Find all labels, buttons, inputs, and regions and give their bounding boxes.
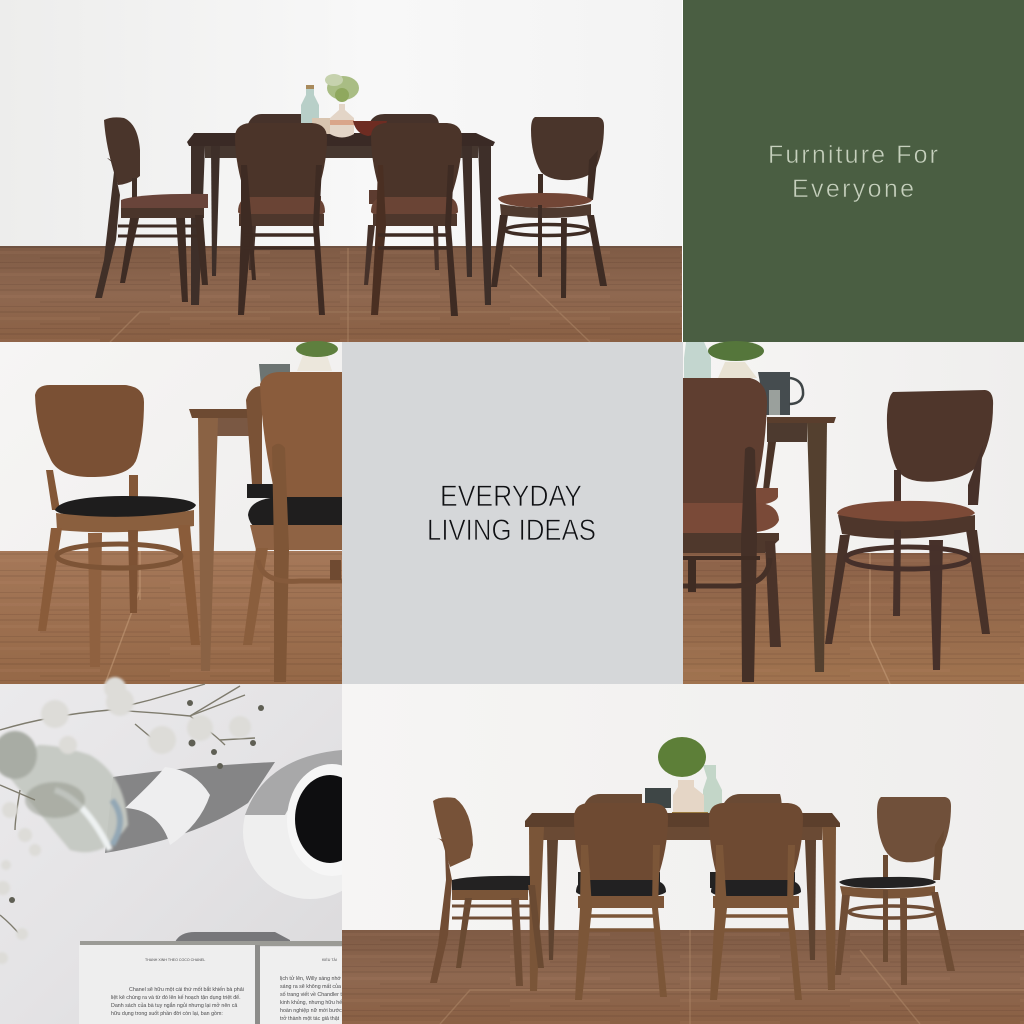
heading: Furniture For Everyone: Everyone (792, 175, 914, 203)
light refraction in shadow (125, 767, 210, 845)
book page text (111, 957, 354, 1022)
left side chair (430, 797, 544, 986)
book page text: sáng ra sẽ không mất của chị (280, 983, 349, 990)
book page text: hữu dụng trong suốt phần đời còn lại, ban gồm: (111, 1011, 223, 1017)
back chairs behind table (241, 114, 447, 285)
book page text: THANH XINH THEO COCO CHANEL (145, 958, 205, 962)
book page text: kinh khủng, nhưng hữu hết các (280, 999, 354, 1006)
panel: table top still life photo (0, 677, 377, 1024)
table (525, 813, 840, 991)
far chair behind (745, 488, 778, 506)
open book (79, 932, 354, 1024)
tabletop vase, bottle and plant (645, 737, 722, 818)
book page text: liệt kê chúng ra và từ đó lên kế hoạch tận dụng triệt để. (111, 994, 241, 1001)
tabletop bottle, vase, flowers and bowl (301, 74, 387, 138)
table (763, 417, 836, 672)
book page text: Chanel sẽ hữu một cái thứ mốt bắt khiến bà phải (129, 986, 244, 993)
main chair with black seat (35, 385, 200, 667)
right facing chair (835, 797, 955, 985)
panel: grey text block (342, 342, 683, 684)
tabletop jug and plant (259, 341, 338, 386)
saucer and coffee cup (243, 750, 377, 899)
heading: Furniture For Everyone: Furniture For (768, 141, 938, 169)
table (189, 409, 262, 671)
tabletop bottle, plant and jug (684, 341, 803, 415)
panel: green title block (683, 0, 1024, 342)
left front chair (235, 123, 327, 315)
panel: dark dining set photo (0, 0, 682, 342)
panel: walnut dining set photo (342, 684, 1024, 1024)
panel: chair with brown seat close-up (683, 341, 1024, 684)
right front chair (371, 123, 462, 316)
left side chair (95, 117, 208, 302)
right front chair (709, 803, 803, 1000)
book page text: KIỂU TÀI (322, 957, 337, 962)
panel: chair with black seat close-up (0, 341, 342, 684)
table (187, 133, 495, 305)
cast shadow (105, 762, 275, 853)
book page text: hoàn nghiệp nữ mới bước đi (280, 1008, 347, 1014)
far chair behind (246, 386, 280, 498)
baby's breath flowers (0, 677, 264, 964)
book page text: Danh sách của bà tuy ngắn ngủi nhưng lại mở nên cả (111, 1002, 237, 1009)
left front chair (574, 803, 668, 1000)
foreground chair (243, 372, 342, 682)
book page text: lịch tử lên, Willy sáng nhớ (280, 975, 341, 982)
heading: Everyday Living Ideas: EVERYDAY (440, 480, 582, 513)
glass vase (0, 731, 128, 852)
right facing chair (491, 117, 607, 298)
book page text: số trang viết về Chandler trước (280, 992, 354, 998)
chairs behind table (578, 794, 795, 888)
foreground chair (683, 378, 781, 682)
main chair with brown seat (825, 390, 993, 670)
heading: Everyday Living Ideas: LIVING IDEAS (427, 514, 596, 547)
book page text: trở thành một tác giả thật (280, 1015, 340, 1022)
